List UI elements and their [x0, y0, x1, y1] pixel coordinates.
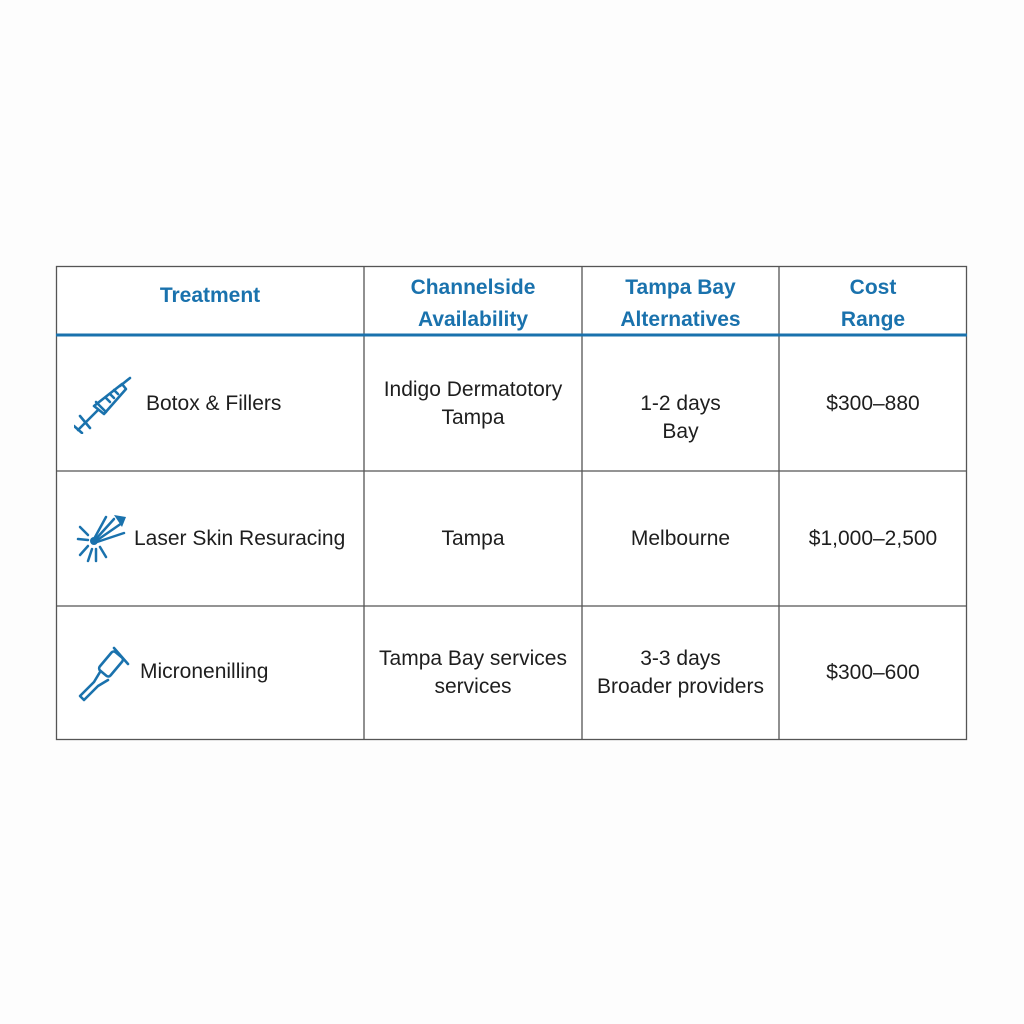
table: $1,000–2,500 [809, 526, 937, 550]
table: $300–600 [826, 661, 920, 684]
text: laser: Laser Skin Resuracing [134, 527, 345, 550]
row1 cells: Indigo Dermatotory [384, 378, 562, 400]
header: tampa bay alternatives [620, 276, 741, 331]
table: Broader providers [597, 675, 764, 698]
header: cost range: Cost [850, 276, 896, 299]
header: channelside availability: Availability [418, 308, 528, 331]
text: microneedling: Micronenilling [140, 660, 268, 683]
header: treatment: Treatment [160, 284, 260, 307]
table: Bay [662, 420, 699, 442]
table: 1-2 days [640, 392, 721, 414]
header: tampa bay alternatives: Tampa Bay [625, 276, 736, 299]
row2 cells: Tampa [441, 526, 505, 550]
table: Melbourne [631, 526, 730, 550]
row3 cells: Tampa Bay services [379, 647, 567, 670]
header: cost range [841, 276, 905, 331]
row1 cells: Tampa [441, 406, 505, 428]
table: 3-3 days [640, 647, 721, 670]
icon: syringe [74, 376, 132, 434]
header: channelside availability: Channelside [411, 276, 535, 299]
row3 cells [379, 647, 567, 698]
icon: microneedling pen [78, 646, 130, 702]
table: $300–880 [826, 392, 920, 414]
header: cost range: Range [841, 308, 905, 331]
header: channelside availability [411, 276, 535, 331]
row3 cells: services [434, 675, 512, 698]
row1 cells [384, 378, 562, 428]
icon: laser [76, 515, 126, 562]
header: tampa bay alternatives: Alternatives [620, 308, 741, 331]
text: botox: Botox & Fillers [146, 392, 281, 415]
